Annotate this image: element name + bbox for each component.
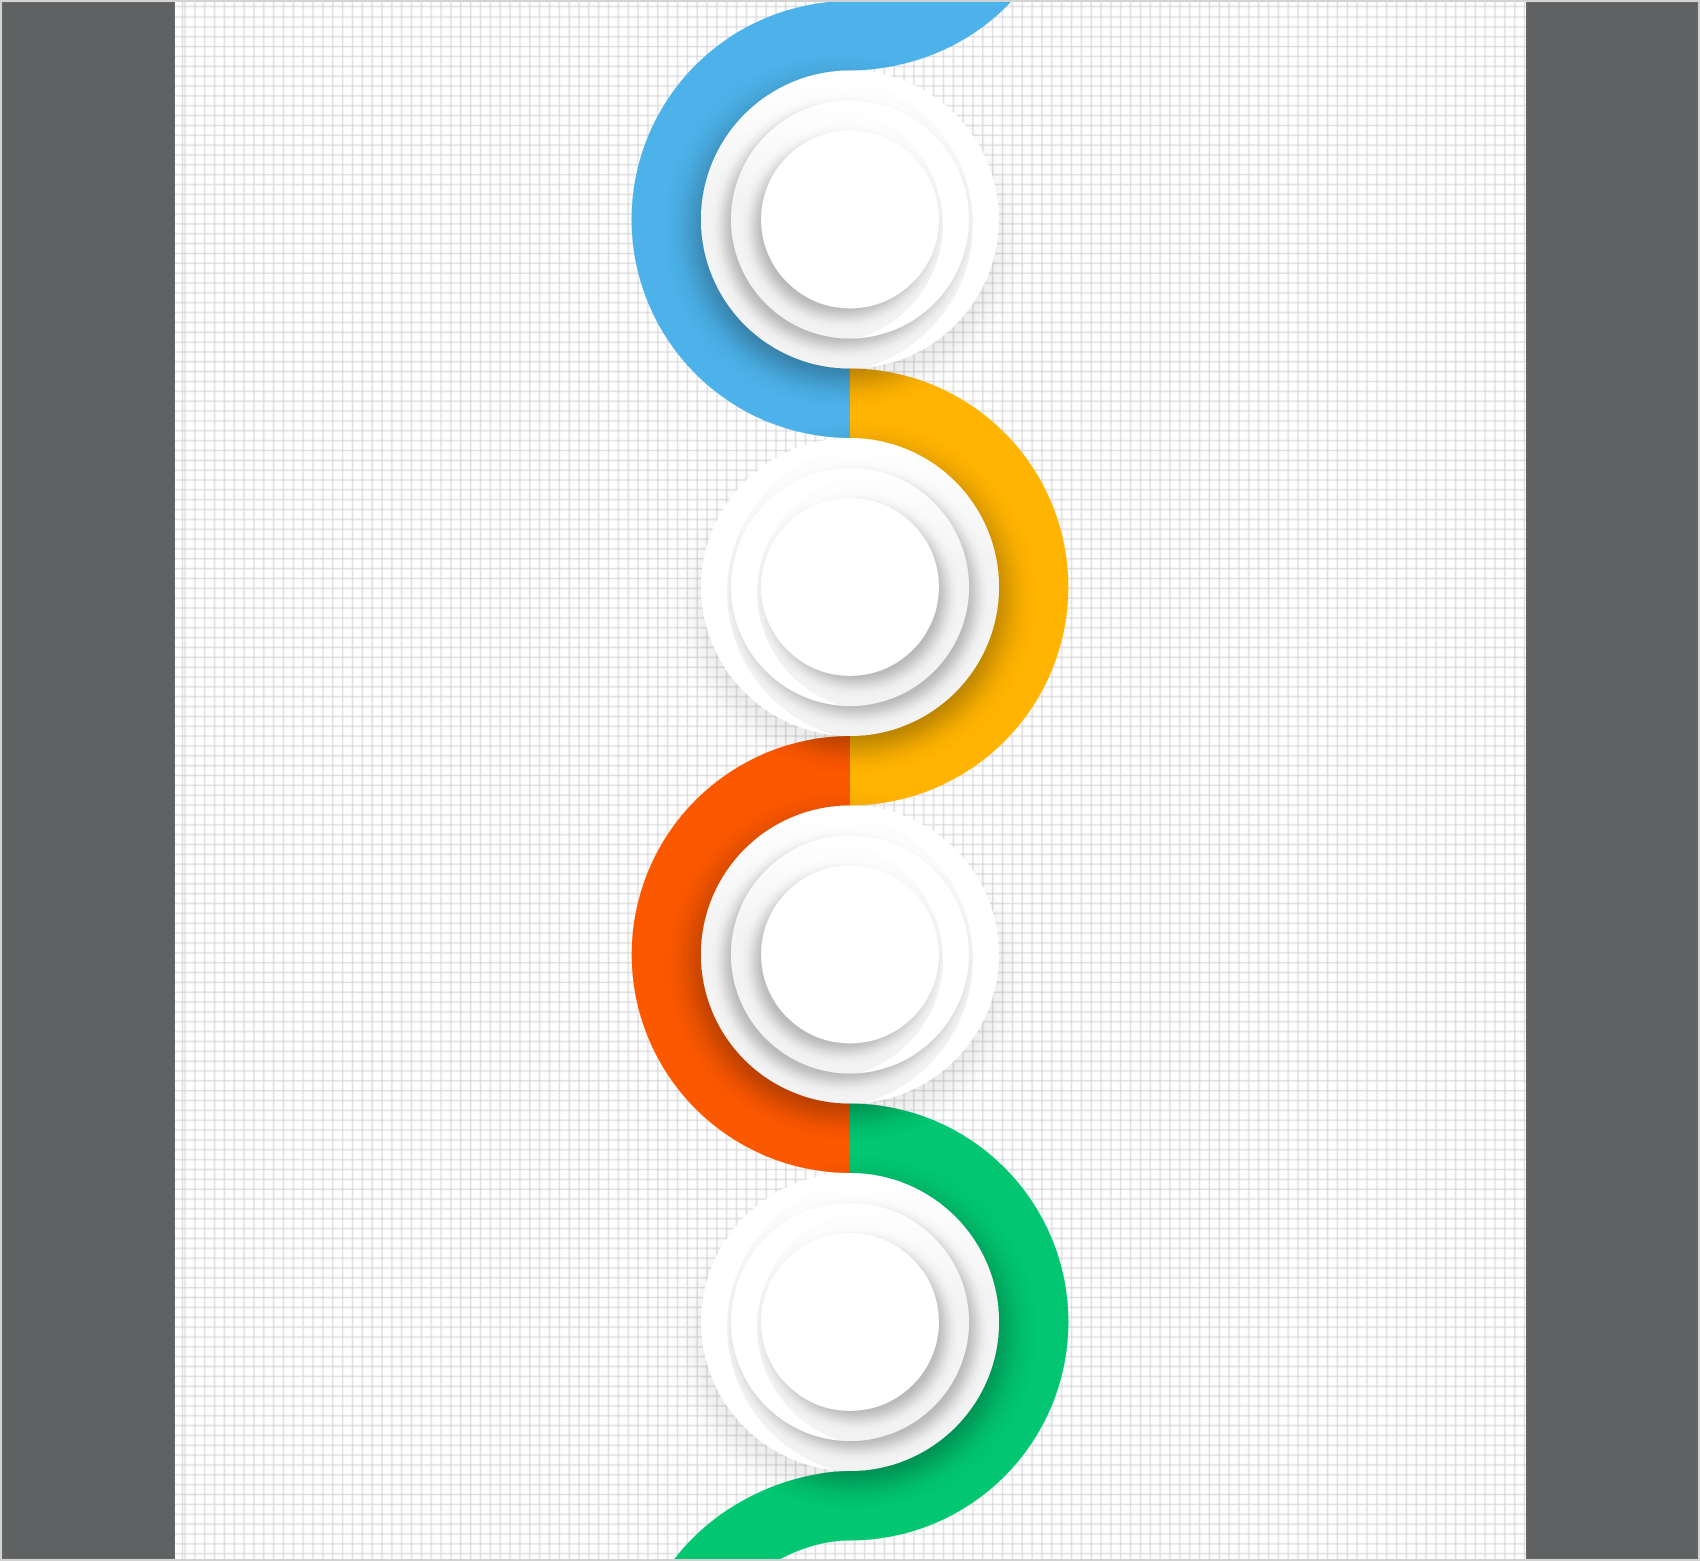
green ribbon segment bbox=[672, 1104, 1068, 1561]
circle stack 3 bbox=[675, 806, 999, 1108]
winding ribbon infographic bbox=[632, 2, 1068, 1559]
circle stack 2 bbox=[701, 438, 1025, 741]
right dark side panel bbox=[1526, 2, 1698, 1559]
disc shadows on the ribbon bbox=[690, 80, 1010, 1482]
yellow ribbon segment bbox=[850, 368, 1068, 806]
blue ribbon segment bbox=[632, 0, 1027, 438]
disc shadows on the grid bbox=[694, 94, 1006, 1488]
orange ribbon segment bbox=[632, 736, 850, 1173]
circle stack 4 bbox=[701, 1173, 1025, 1476]
left dark side panel bbox=[2, 2, 174, 1559]
circle stack 1 bbox=[675, 70, 999, 374]
grid paper background bbox=[174, 2, 1526, 1559]
